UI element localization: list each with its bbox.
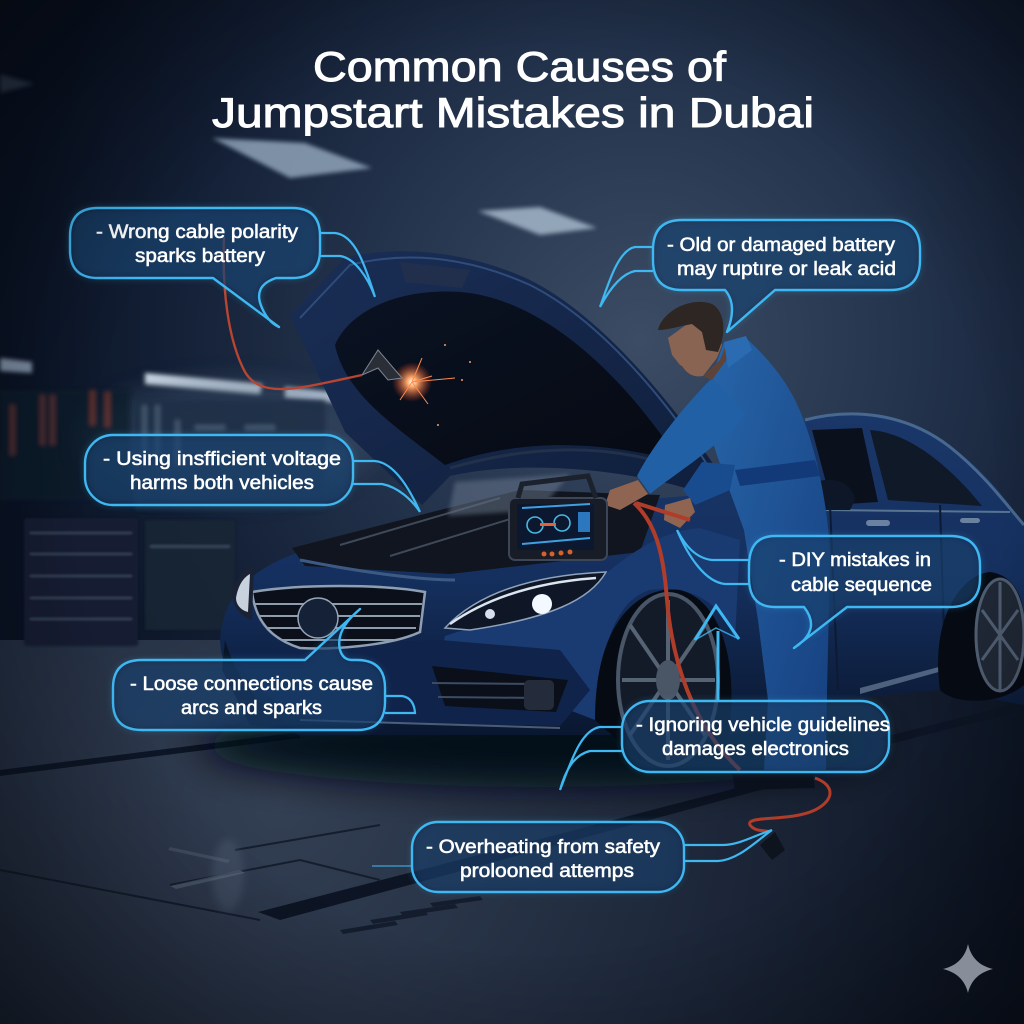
callout: overheating: - Overheating from safety	[426, 837, 661, 858]
callout: DIY mistakes: - DIY mistakes in	[779, 550, 931, 571]
floor clamp	[760, 832, 785, 860]
callout: DIY mistakes	[677, 530, 980, 648]
mechanic	[605, 302, 830, 790]
icon: sparkle star	[943, 944, 993, 993]
car body	[220, 415, 1024, 735]
tool cabinet	[24, 518, 235, 646]
callout: ignoring guidelines: damages electronics	[662, 739, 849, 760]
front fender	[440, 528, 740, 720]
arrow pointing up	[695, 606, 739, 700]
callout: loose connections: arcs and sparks	[181, 698, 322, 719]
roof highlight	[805, 414, 1024, 525]
open hood	[290, 251, 716, 505]
title: Common Causes of	[313, 43, 726, 90]
left headlight	[232, 566, 254, 620]
callout: loose connections	[113, 609, 415, 730]
callout: wrong cable polarity	[70, 208, 375, 327]
title: Jumpstart Mistakes in Dubai	[212, 89, 814, 136]
red jumper cable upper	[224, 237, 362, 389]
red jumper cable lower	[634, 503, 830, 832]
boot	[732, 770, 815, 790]
charger device	[509, 476, 607, 560]
callout: DIY mistakes: cable sequence	[791, 575, 932, 596]
callout: old or damaged battery: may ruptıre or leak acid	[677, 259, 896, 280]
title	[212, 43, 814, 136]
callout: old or damaged battery: - Old or damaged battery	[667, 235, 896, 256]
tool wall	[0, 390, 325, 510]
callout: ignoring guidelines: - Ignoring vehicle guidelines	[636, 715, 890, 736]
arm	[637, 378, 745, 494]
callout: insufficient voltage	[85, 435, 420, 512]
front bumper	[232, 640, 590, 726]
callout: wrong cable polarity: sparks battery	[135, 246, 266, 267]
door handles	[866, 518, 980, 526]
floor markings	[0, 702, 1024, 934]
engine bay	[292, 490, 660, 574]
mirror	[815, 480, 855, 510]
rear wheel	[938, 572, 1024, 701]
callout: loose connections: - Loose connections cause	[130, 674, 373, 695]
callout: old or damaged battery	[600, 220, 920, 332]
head	[668, 322, 722, 376]
grille	[252, 586, 425, 648]
front wheel	[595, 590, 731, 766]
right headlight	[445, 572, 606, 630]
callout: ignoring guidelines	[560, 701, 890, 790]
callout: insufficient voltage: - Using insfficient voltage	[103, 449, 341, 470]
callout: wrong cable polarity: - Wrong cable polarity	[96, 222, 299, 243]
hands	[605, 480, 648, 510]
callout: overheating: prolooned attemps	[460, 861, 634, 882]
side windows	[812, 428, 1010, 512]
spark and clamp	[362, 344, 471, 426]
callout: overheating	[372, 822, 772, 892]
callout: insufficient voltage: harms both vehicles	[130, 473, 314, 494]
legs and torso	[705, 337, 830, 770]
car	[220, 414, 1024, 766]
